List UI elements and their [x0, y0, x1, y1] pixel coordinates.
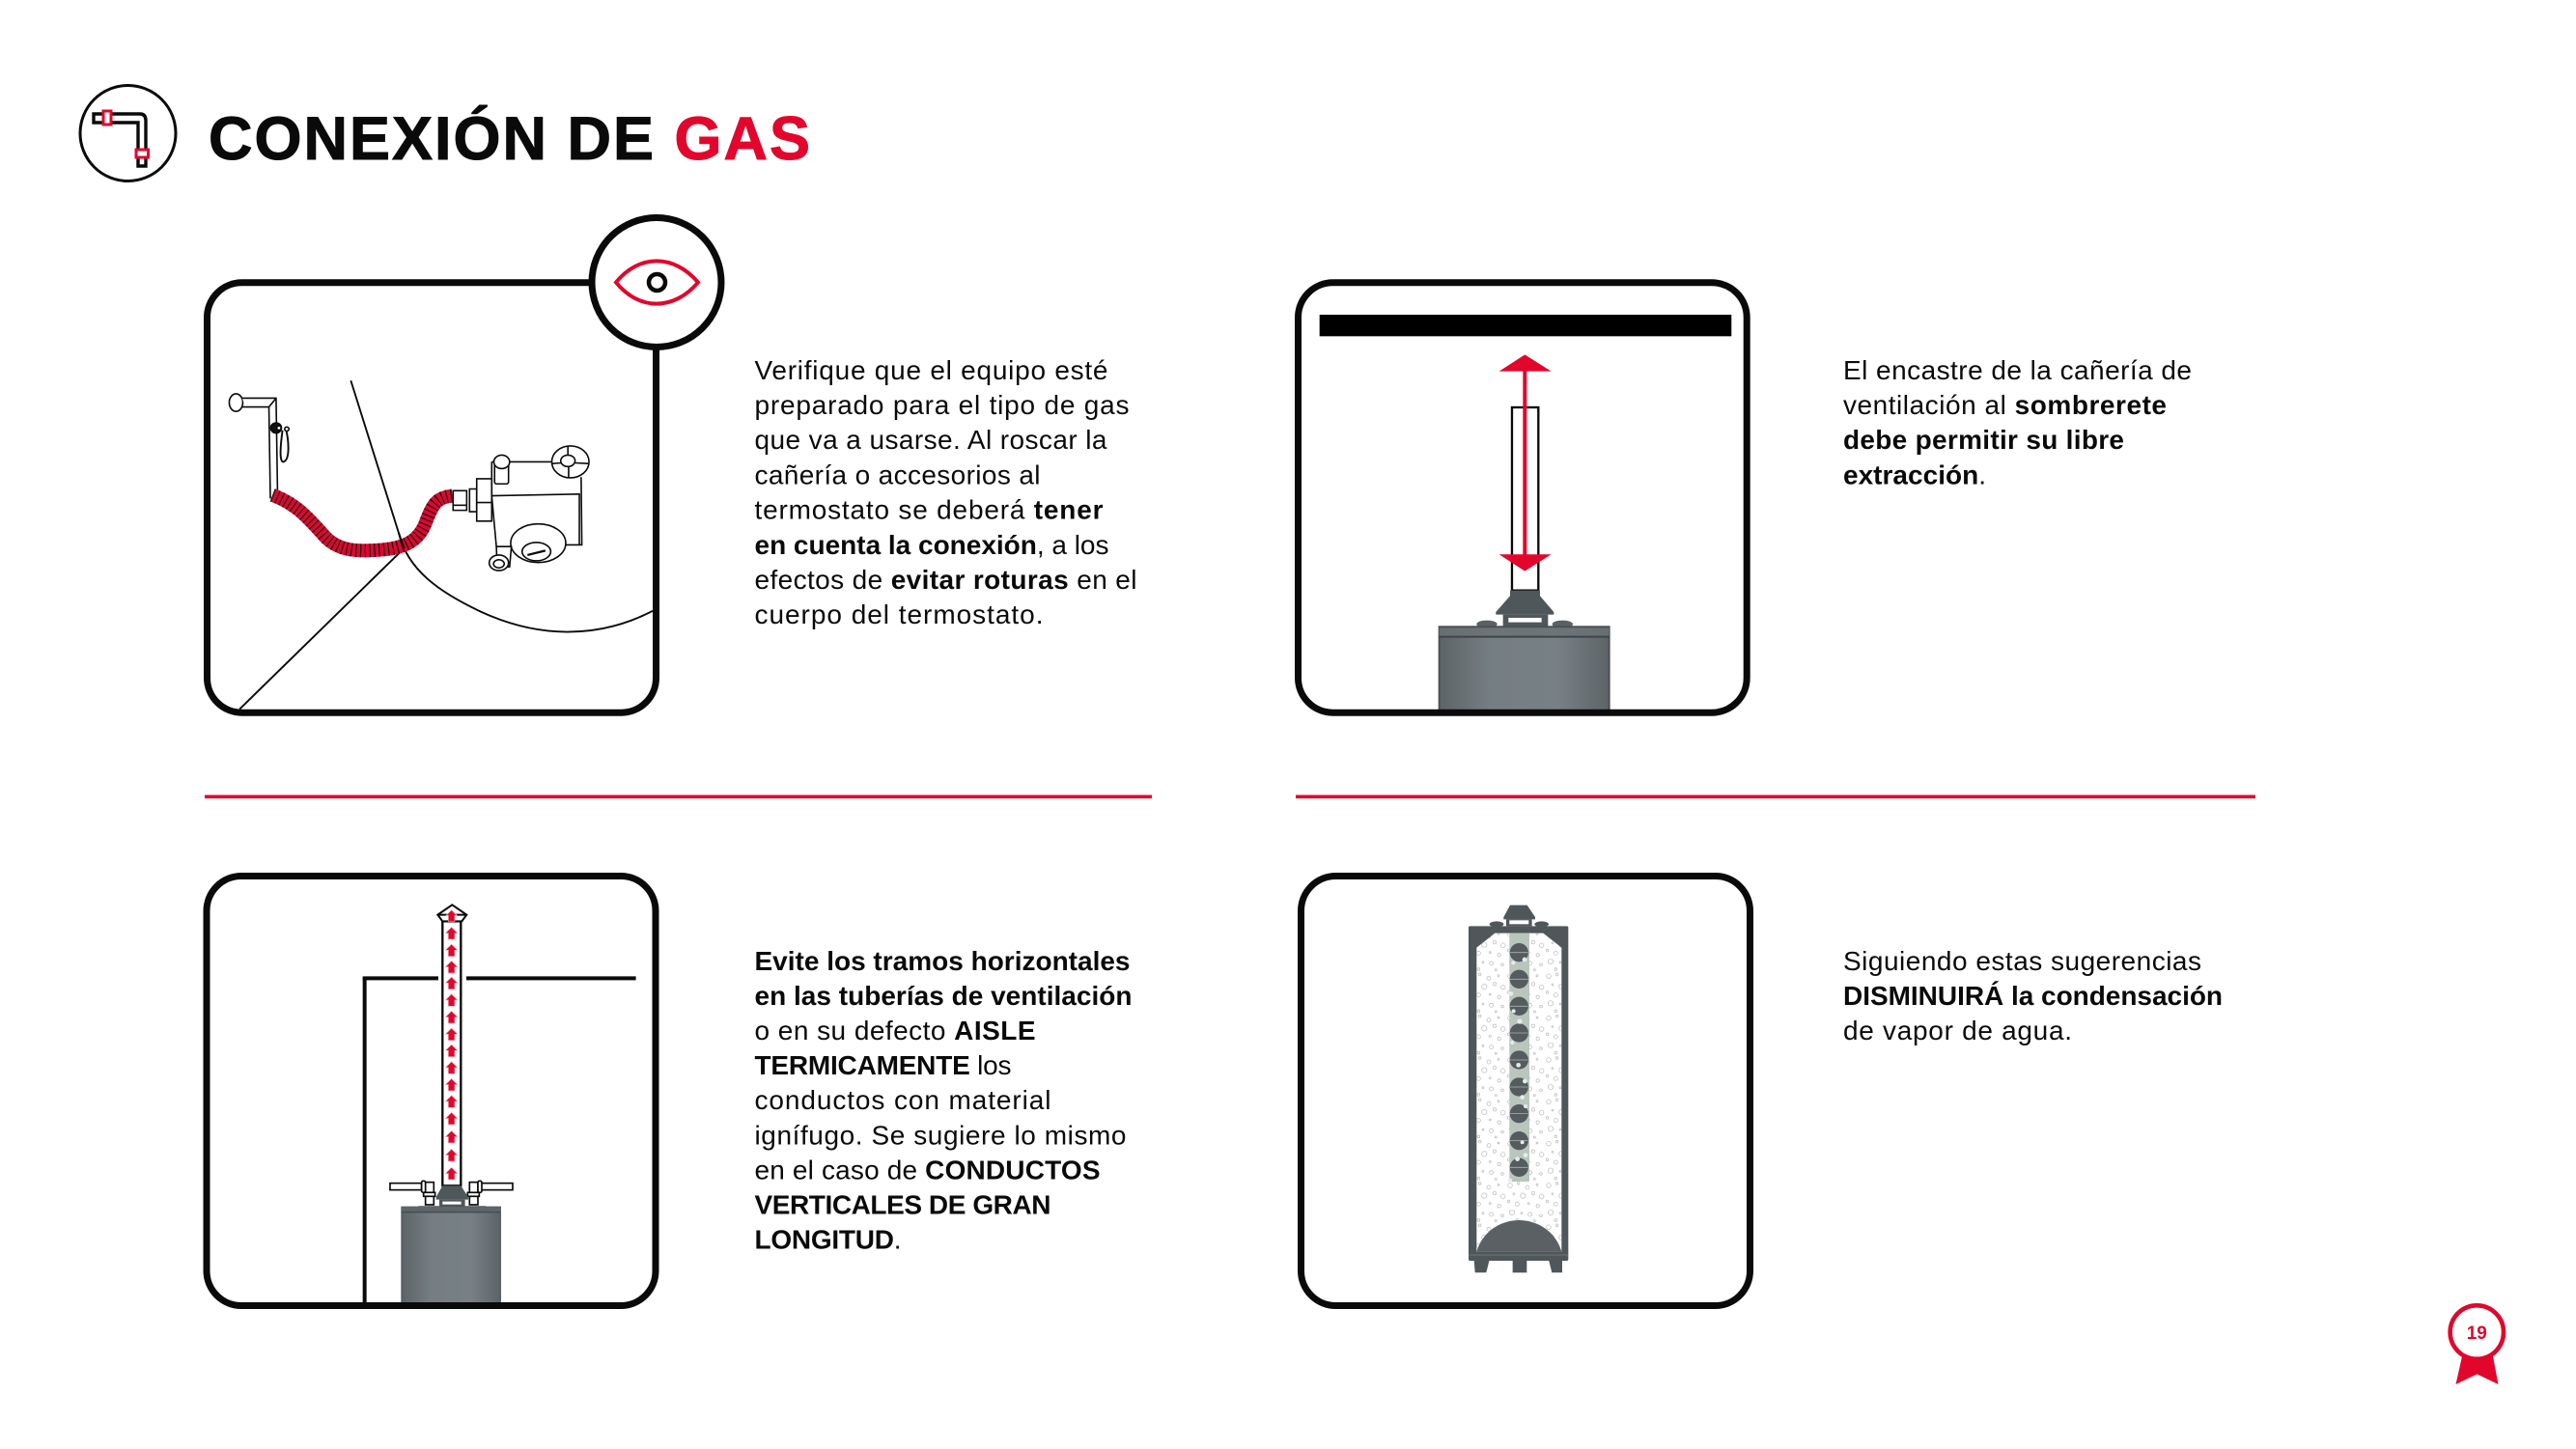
icon: gas pipe — [80, 85, 176, 181]
text: horizontal sections and insulation: LONGITUD. — [755, 1225, 902, 1255]
text: gas type verification — [755, 355, 1137, 629]
text: gas type verification: cuerpo del termostato. — [755, 599, 1043, 629]
text: horizontal sections and insulation: en el caso de CONDUCTOS — [755, 1155, 1101, 1184]
panel: vertical vent illustration — [207, 877, 656, 1305]
text: condensation reduction: de vapor de agua. — [1843, 1016, 2072, 1045]
divider line left — [205, 795, 1152, 798]
text: gas type verification: cañería o accesorios al — [755, 460, 1041, 489]
divider line right — [1296, 795, 2255, 798]
illustration: vent stack with upward arrows — [363, 905, 636, 1304]
text: gas type verification: Verifique que el equipo esté — [755, 355, 1108, 385]
text: horizontal sections and insulation: VERTICALES DE GRAN — [755, 1189, 1050, 1220]
text: vent pipe extraction: debe permitir su libre — [1843, 425, 2124, 455]
text: vent pipe extraction — [1843, 355, 2192, 489]
text: gas type verification: preparado para el tipo de gas — [755, 390, 1130, 420]
text: condensation reduction — [1843, 946, 2223, 1045]
panel: gas connection illustration — [207, 218, 721, 712]
text: horizontal sections and insulation: Evite los tramos horizontales — [755, 946, 1130, 976]
text: horizontal sections and insulation — [755, 946, 1132, 1255]
text: gas type verification: en cuenta la conexión, a los — [755, 530, 1108, 560]
text: gas type verification: termostato se deberá tener — [755, 495, 1104, 525]
illustration: heater cross-section with vapor — [1469, 906, 1568, 1272]
page number badge — [2450, 1305, 2504, 1384]
illustration: thermostat and flexible hose — [229, 380, 653, 710]
illustration: heater with removable vent pipe — [1320, 315, 1731, 711]
text: horizontal sections and insulation: conductos con material — [755, 1085, 1050, 1115]
text: vent pipe extraction: extracción. — [1843, 460, 1986, 489]
text: condensation reduction: DISMINUIRÁ la condensación — [1843, 981, 2223, 1011]
text: vent pipe extraction: ventilación al sombrerete — [1843, 390, 2167, 420]
text: gas type verification: que va a usarse. Al roscar la — [755, 425, 1107, 455]
text: horizontal sections and insulation: en las tuberías de ventilación — [755, 981, 1132, 1011]
text: vent pipe extraction: El encastre de la cañería de — [1843, 355, 2192, 385]
page number badge: 19 — [2467, 1324, 2487, 1344]
text: condensation reduction: Siguiendo estas sugerencias — [1843, 946, 2201, 976]
title: CONEXIÓN DE GAS — [209, 105, 810, 173]
panel: vent pipe extraction illustration — [1298, 283, 1747, 712]
text: horizontal sections and insulation: ignífugo. Se sugiere lo mismo — [755, 1120, 1126, 1150]
panel: condensation illustration — [1302, 877, 1750, 1305]
text: horizontal sections and insulation: o en su defecto AISLE — [755, 1016, 1035, 1045]
text: gas type verification: efectos de evitar roturas en el — [755, 565, 1137, 595]
text: horizontal sections and insulation: TERMICAMENTE los — [755, 1050, 1012, 1080]
icon: eye — [592, 218, 721, 348]
